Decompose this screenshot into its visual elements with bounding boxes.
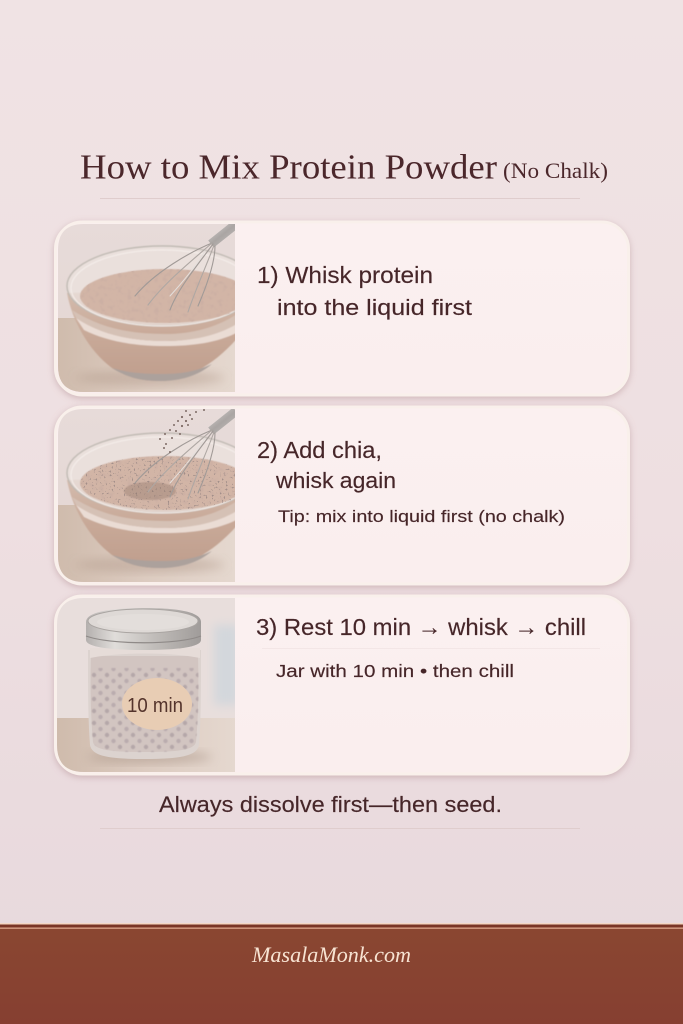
panel: step 1 (56, 222, 628, 395)
photo: whisking protein into liquid in a glass bowl (58, 224, 235, 392)
step 2 heading (257, 437, 396, 493)
time label (122, 678, 192, 730)
jar lid (86, 608, 201, 650)
step 1 heading (257, 262, 473, 320)
step 3 note: Jar with 10 min • then chill (276, 661, 514, 681)
step 1 heading: into the liquid first (277, 295, 473, 320)
footer website: MasalaMonk.com (251, 942, 411, 967)
panel: step 2 (56, 407, 628, 584)
step 2 tip: Tip: mix into liquid first (no chalk) (278, 507, 565, 526)
photo: adding chia seeds while whisking (58, 409, 235, 582)
card background (56, 596, 628, 774)
jar body (88, 650, 201, 759)
panel: step 3 (56, 596, 628, 774)
closing note: Always dissolve first—then seed. (159, 792, 502, 817)
step 1 heading: 1) Whisk protein (257, 262, 433, 288)
step 2 heading: whisk again (275, 468, 396, 493)
card background (56, 407, 628, 584)
step 2 heading: 2) Add chia, (257, 437, 382, 463)
step 3 heading: 3) Rest 10 min → whisk → chill (256, 614, 586, 640)
photo: jar with 10 min label (57, 598, 239, 772)
title: How to Mix Protein Powder (80, 148, 497, 186)
card background (56, 222, 628, 395)
falling chia seeds (159, 409, 205, 453)
title: (No Chalk) (503, 158, 608, 183)
footer band (0, 923, 683, 1024)
time label: 10 min (127, 695, 183, 717)
